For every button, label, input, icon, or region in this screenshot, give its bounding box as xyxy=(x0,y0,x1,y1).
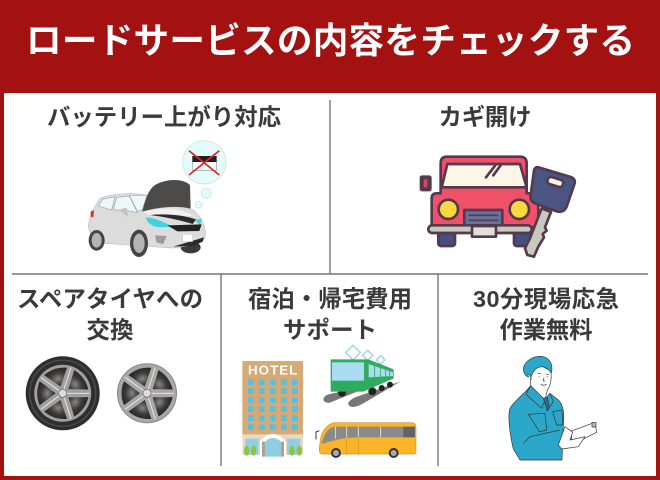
heading: lodging: 宿泊・帰宅費用 xyxy=(248,286,412,312)
icon: tire xyxy=(26,356,100,430)
panel: unlocking xyxy=(421,104,575,257)
panel: free on-site work: 作業無料 xyxy=(500,317,592,343)
icon: hotel: HOTEL xyxy=(248,363,297,378)
icon: hotel xyxy=(242,361,303,457)
icon: wheel xyxy=(118,364,176,423)
title: ロードサービスの内容をチェックする xyxy=(26,21,635,61)
panel: free on-site work xyxy=(473,286,619,460)
panel: lodging and transport: サポート xyxy=(283,317,377,343)
heading: free work: 30分現場応急 xyxy=(473,286,619,312)
heading: spare tire: スペアタイヤへの xyxy=(17,286,203,312)
icon: mechanic xyxy=(509,356,597,460)
icon: bus xyxy=(316,423,416,458)
panel: battery xyxy=(47,103,281,257)
panel: spare tire xyxy=(17,286,203,430)
heading: unlocking: カギ開け xyxy=(438,104,532,130)
icon: car with raised hood xyxy=(88,141,226,257)
panel: spare tire: 交換 xyxy=(86,317,134,343)
icon: train xyxy=(323,345,401,407)
thought bubble xyxy=(183,141,226,217)
content panel xyxy=(4,93,656,476)
icon: car and key xyxy=(421,157,575,257)
panel: lodging and transport xyxy=(242,286,416,458)
heading: battery: バッテリー上がり対応 xyxy=(47,103,281,130)
